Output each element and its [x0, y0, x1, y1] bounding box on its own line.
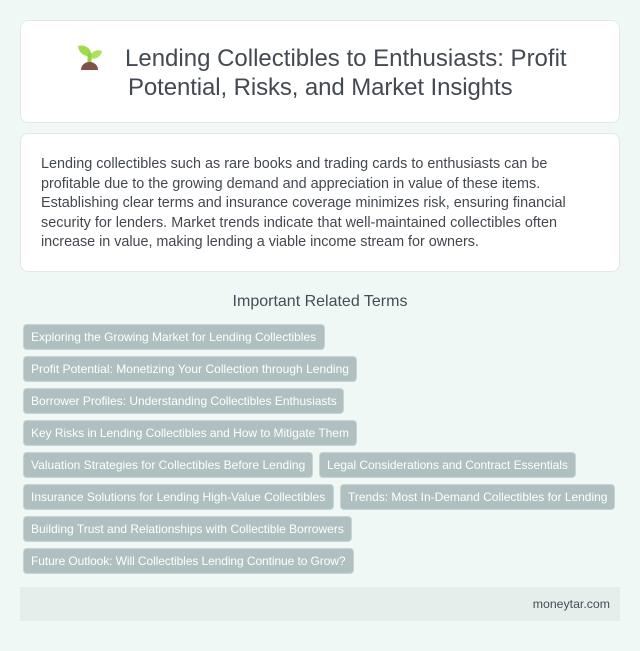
chip: Legal Considerations and Contract Essentials [327, 458, 568, 472]
chip: Exploring the Growing Market for Lending Collectibles [31, 330, 316, 344]
description text: increase in value, making lending a viable income stream for owners. [41, 234, 479, 250]
chip [341, 485, 614, 509]
chip: Key Risks in Lending Collectibles and How to Mitigate Them [31, 426, 349, 440]
chip [24, 549, 353, 573]
description text: profitable due to the growing demand and appreciation in value of these items. [41, 176, 540, 192]
chip [24, 453, 312, 477]
description text: Lending collectibles such as rare books and trading cards to enthusiasts can be [41, 156, 547, 172]
heading: related terms: Important Related Terms [233, 293, 407, 310]
chip: Insurance Solutions for Lending High-Value Collectibles [31, 490, 325, 504]
panel: title card [20, 20, 620, 123]
chip: Borrower Profiles: Understanding Collectibles Enthusiasts [31, 394, 337, 408]
chip [24, 517, 351, 541]
footer bar [20, 587, 620, 621]
chip [24, 485, 333, 509]
chip: Future Outlook: Will Collectibles Lending Continue to Grow? [31, 554, 345, 568]
description text: Establishing clear terms and insurance coverage minimizes risk, ensuring financial [41, 195, 566, 211]
chip: Profit Potential: Monetizing Your Collection through Lending [31, 362, 349, 376]
panel: description [20, 133, 620, 272]
chip [24, 325, 324, 349]
chip [24, 389, 343, 413]
title line 1: Lending Collectibles to Enthusiasts: Profit [125, 45, 567, 72]
description text: security for lenders. Market trends indicate that well-maintained collectibles often [41, 214, 557, 230]
chip: Valuation Strategies for Collectibles Before Lending [31, 458, 305, 472]
related terms chips [23, 324, 615, 574]
chip: Building Trust and Relationships with Collectible Borrowers [31, 522, 344, 536]
chip [320, 453, 575, 477]
chip [24, 421, 356, 445]
chip [24, 357, 356, 381]
icon: seedling [78, 46, 102, 70]
description text [41, 156, 566, 250]
title line 2: Potential, Risks, and Market Insights [128, 74, 512, 101]
chip: Trends: Most In-Demand Collectibles for Lending [348, 490, 607, 504]
footer source: moneytar.com [533, 597, 610, 611]
